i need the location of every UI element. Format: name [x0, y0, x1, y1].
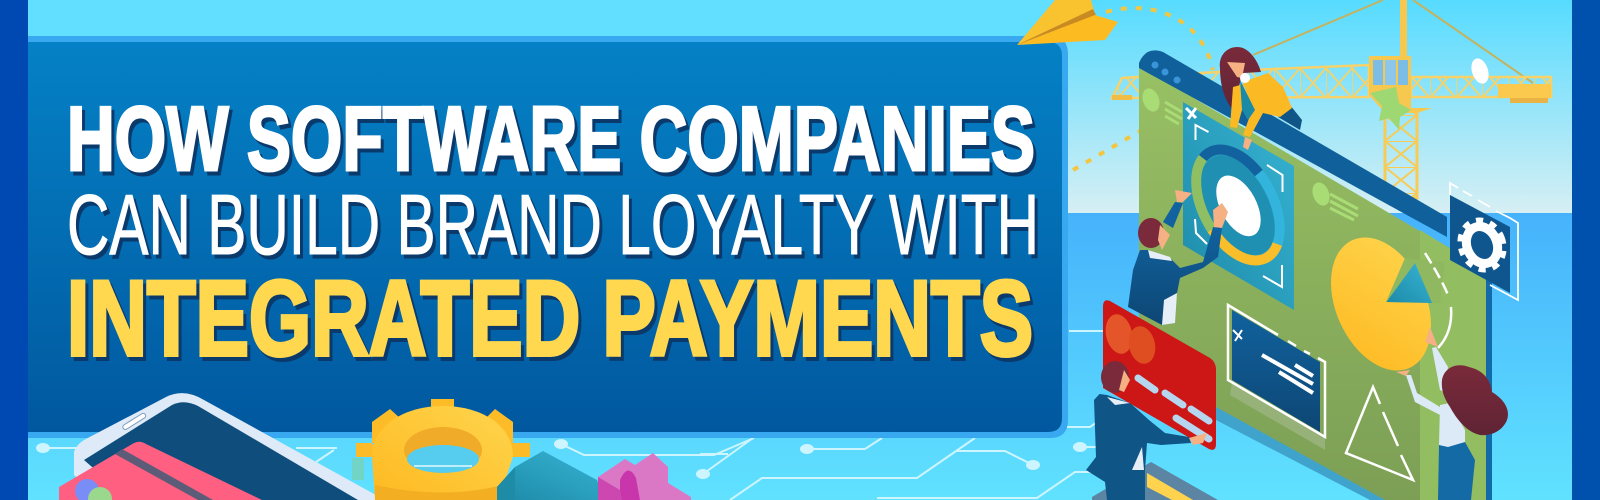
pants: [1438, 442, 1475, 500]
window dots: [1152, 62, 1180, 84]
phone screen: [84, 402, 358, 500]
icon: magenta puzzle block: [598, 453, 691, 500]
donut chart: [1179, 136, 1297, 274]
person: woman with pie chart: [1396, 327, 1508, 500]
triangle outline: [1346, 387, 1413, 480]
hair: [1442, 365, 1508, 435]
person: man reaching up: [1128, 190, 1228, 325]
gear hole: [404, 427, 482, 473]
dialog box: [1228, 305, 1325, 450]
shirt: [1439, 403, 1465, 447]
hair: [1220, 47, 1261, 110]
teal target panel: [1179, 102, 1297, 310]
software window: [1139, 50, 1518, 500]
board shadow: [1216, 405, 1395, 500]
circuit lines on floor: [36, 331, 1120, 500]
face: [1158, 225, 1170, 250]
pink card: [59, 442, 262, 500]
person: woman on top of window: [1220, 47, 1302, 150]
left arm: [1230, 84, 1244, 128]
phone with card: [59, 393, 385, 500]
raised arm: [1432, 347, 1448, 392]
icon: paper plane: [1017, 0, 1118, 45]
gear lower extrusion: [375, 485, 503, 500]
collar: [1148, 250, 1172, 261]
collar: [1240, 73, 1250, 83]
heading line 3: INTEGRATED PAYMENTS: [67, 258, 1033, 378]
heading line 2: CAN BUILD BRAND LOYALTY WITH: [67, 178, 1039, 273]
board side edge: [1480, 240, 1492, 500]
crane: [1112, 0, 1551, 198]
board face: [1139, 66, 1486, 500]
sweater: [1243, 73, 1292, 137]
pie chart: [1311, 222, 1451, 386]
other arm: [1406, 375, 1440, 415]
phone body: [74, 393, 385, 500]
side ghost: [352, 458, 364, 480]
board top bar: [1139, 50, 1447, 237]
gear body: [372, 406, 513, 500]
pants: [1278, 105, 1302, 130]
hair: [1138, 218, 1164, 248]
credit card: [1102, 300, 1216, 450]
floating card on floor: [1092, 462, 1218, 500]
person: man holding credit card: [1086, 361, 1207, 500]
side band right: [1572, 0, 1600, 500]
hand: [1243, 137, 1252, 150]
dotted flight path: [1073, 8, 1213, 170]
background: top strip: [28, 0, 1068, 40]
background: sea and floor: [0, 213, 1600, 500]
heading: [67, 89, 1039, 378]
header ornament: [1139, 86, 1358, 220]
jacket: [1128, 227, 1222, 325]
tie: [1240, 80, 1255, 120]
gear tile: [1450, 183, 1518, 300]
background: sky: [0, 0, 1600, 213]
face: [1227, 62, 1245, 78]
hands: [1175, 190, 1228, 228]
speaker: [122, 412, 147, 430]
hands: [1396, 327, 1438, 376]
title panel: [28, 36, 1068, 438]
gear teeth: [356, 399, 530, 457]
icon: yellow gear: [352, 399, 530, 500]
target corners: [1195, 125, 1282, 287]
board right fold: [1420, 230, 1486, 500]
side band left: [0, 0, 28, 500]
icon: teal puzzle block: [497, 451, 605, 500]
shirt: [1162, 293, 1177, 325]
heading line 1: HOW SOFTWARE COMPANIES: [67, 89, 1035, 190]
raised arm: [1163, 202, 1183, 228]
